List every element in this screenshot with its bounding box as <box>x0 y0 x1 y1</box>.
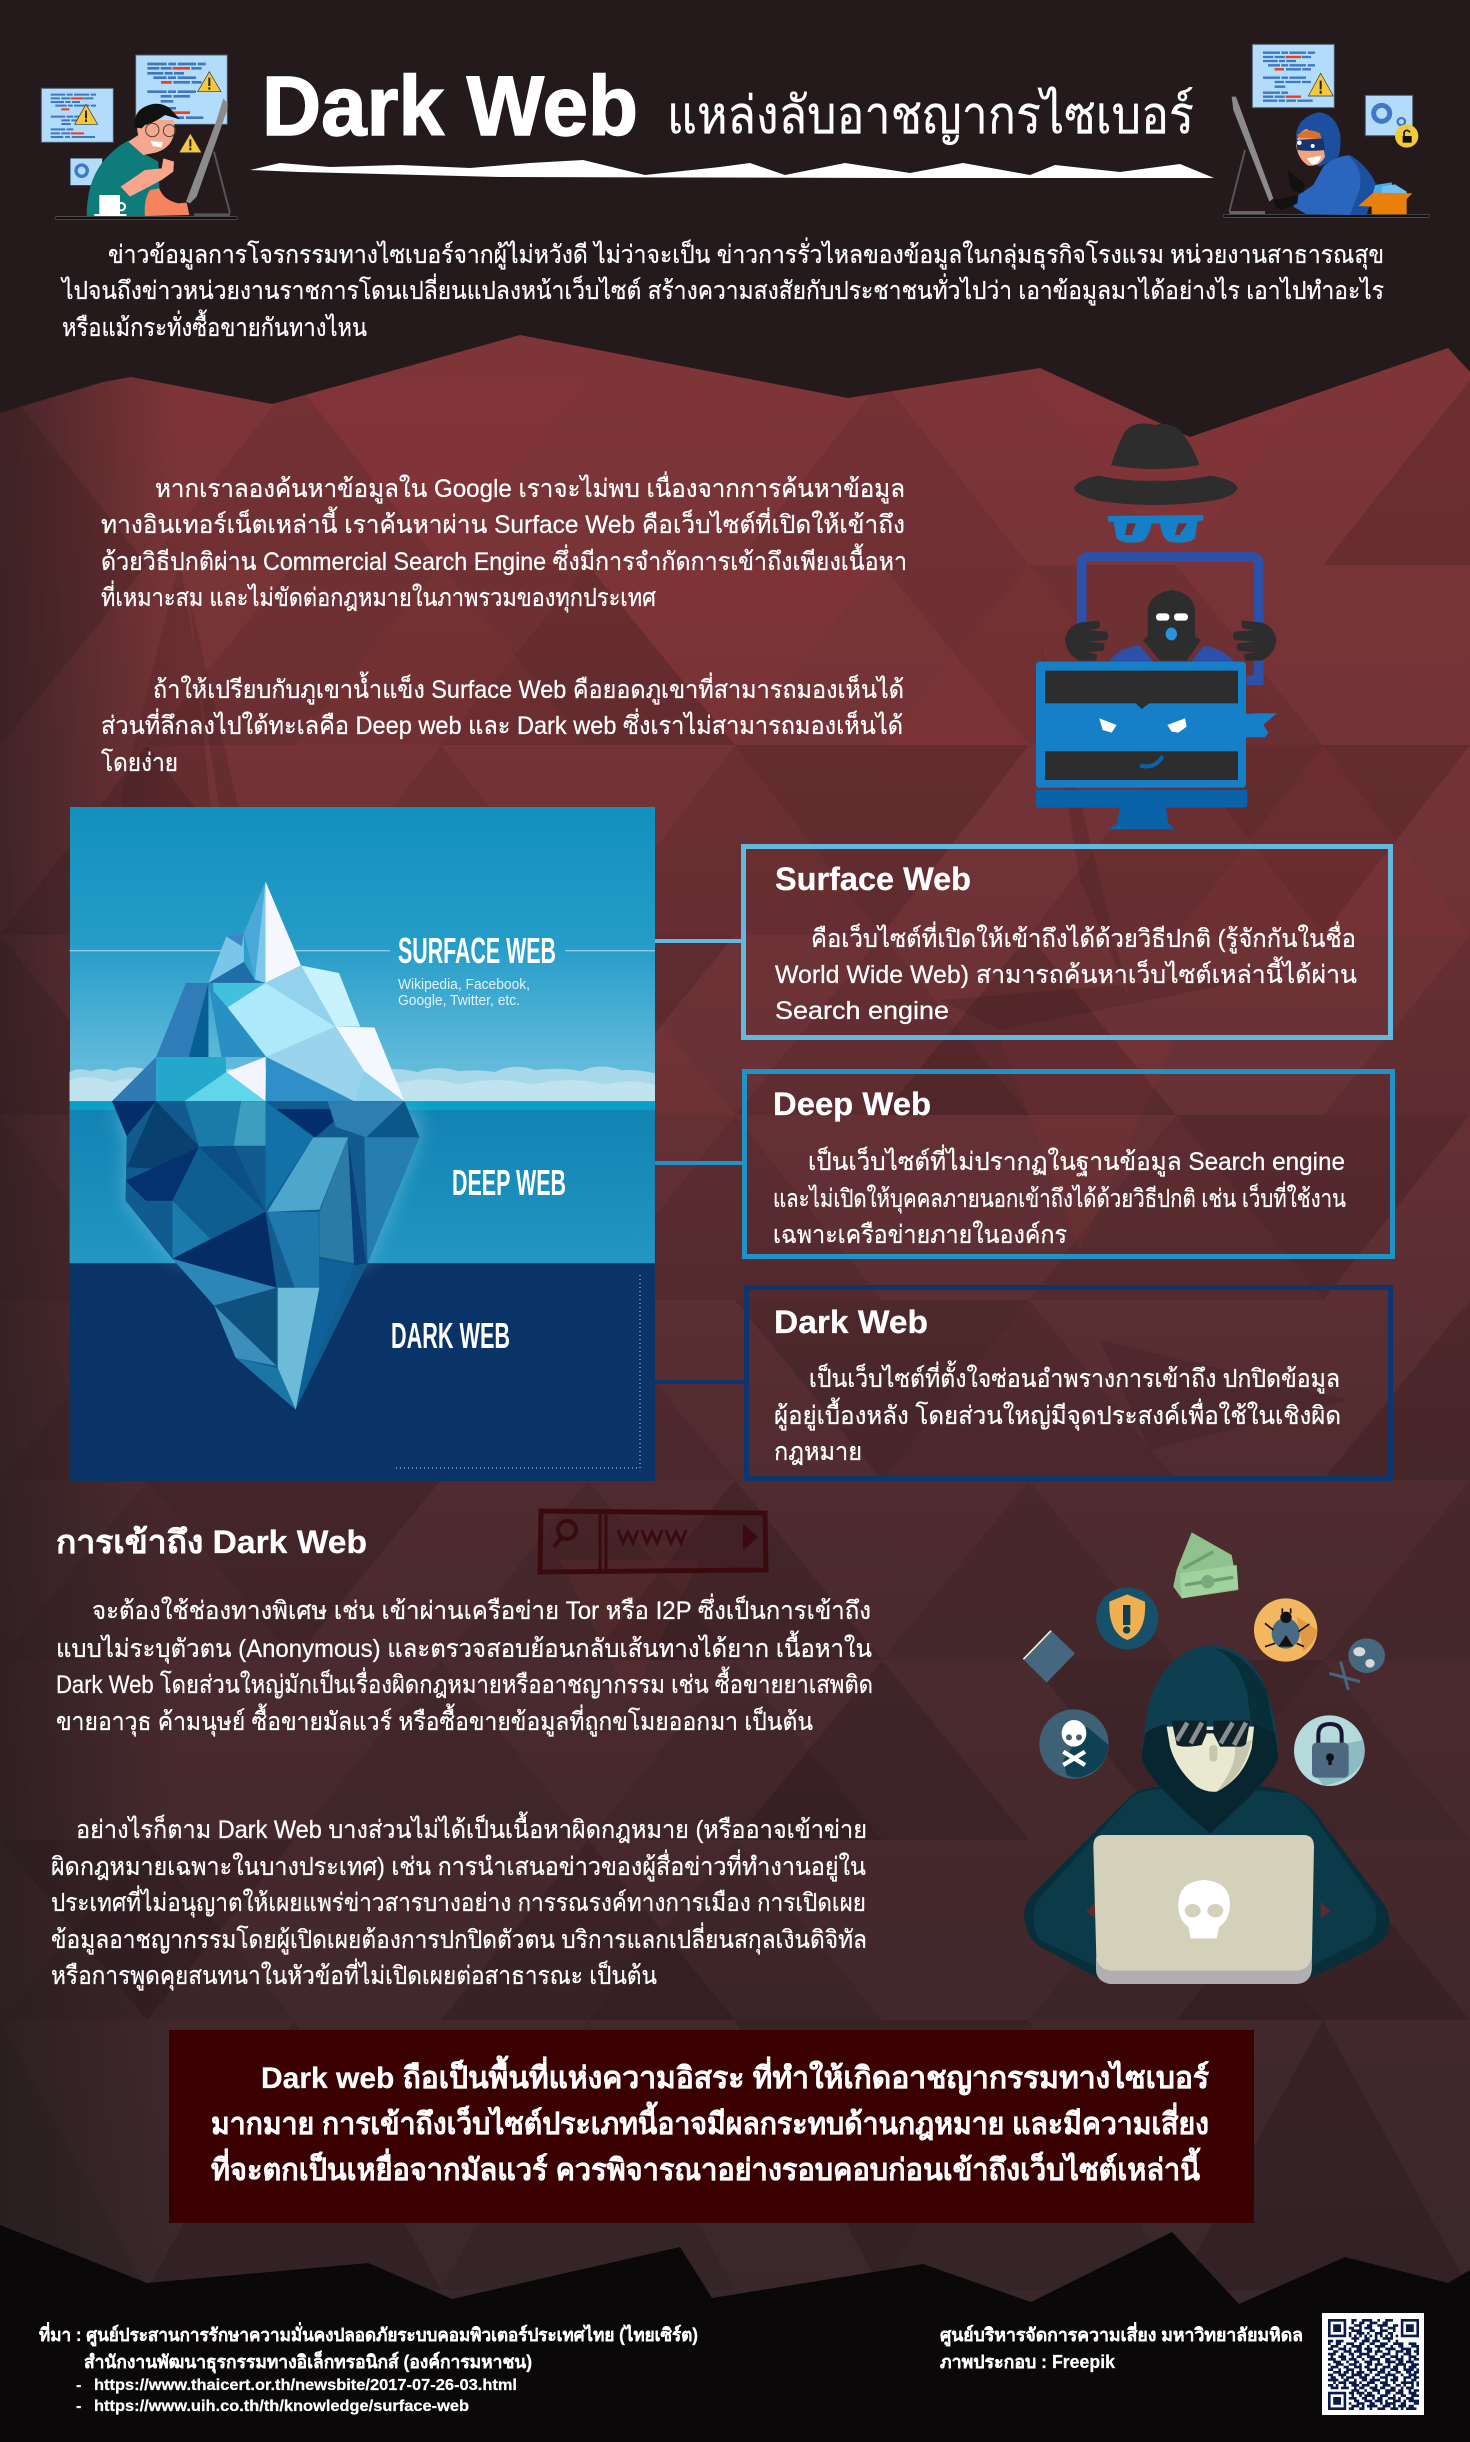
footer: sources: สำนักงานพัฒนาธุรกรรมทางอิเล็กทรอนิกส์ (องค์การมหาชน) <box>84 2350 532 2374</box>
panel: Dark Web <box>746 1288 1390 1478</box>
iceberg labels: Wikipedia, Facebook, <box>398 976 530 993</box>
iceberg chart <box>70 807 655 1481</box>
paragraph: Google and Surface Web: ด้วยวิธีปกติผ่าน Commercial Search Engine ซึ่งมีการจำกัดการเข้าถึงเพียงเนื้อหา <box>101 543 907 576</box>
paragraph: Google and Surface Web: ทางอินเทอร์เน็ตเหล่านี้ เราค้นหาผ่าน Surface Web คือเว็บไซต์ที่เปิดให้เข้าถึง <box>101 506 905 539</box>
paragraph: Google and Surface Web: ที่เหมาะสม และไม่ขัดต่อกฎหมายในภาพรวมของทุกประเทศ <box>101 580 656 613</box>
callout: summary: มากมาย การเข้าถึงเว็บไซต์ประเภทนี้อาจมีผลกระทบด้านกฎหมาย และมีความเสี่ยง <box>211 2101 1209 2141</box>
text: Dark Web description <box>774 1360 1341 1466</box>
iceberg labels: Google, Twitter, etc. <box>398 992 520 1009</box>
intro text: หรือแม้กระทั่งซื้อขายกันทางไหน <box>62 309 367 342</box>
icon: bug <box>1254 1598 1317 1662</box>
text: Surface Web description: Search engine <box>775 997 949 1025</box>
paragraph: legitimate uses: ประเทศที่ไม่อนุญาตให้เผยแพร่ข่าวสารบางอย่าง การรณรงค์ทางการเมือง การเปิดเผย <box>51 1885 866 1918</box>
footer: sources: https://www.thaicert.or.th/newsbite/2017-07-26-03.html <box>94 2377 517 2394</box>
iceberg above water <box>112 882 404 1101</box>
connector lines <box>655 939 745 1384</box>
heading: accessing the Dark Web: การเข้าถึง Dark Web <box>56 1524 367 1560</box>
text: Deep Web description: และไม่เปิดให้บุคคลภายนอกเข้าถึงได้ด้วยวิธีปกติ เช่น เว็บที่ใช้งาน <box>773 1181 1346 1214</box>
title <box>262 59 1194 153</box>
icon: money <box>1173 1532 1238 1598</box>
iceberg below water <box>112 1101 419 1410</box>
paragraph: Google and Surface Web: หากเราลองค้นหาข้อมูลใน Google เราจะไม่พบ เนื่องจากการค้นหาข้อมูล <box>155 471 905 504</box>
title: แหล่งลับอาชญากรไซเบอร์ <box>667 86 1194 145</box>
intro text: ไปจนถึงข่าวหน่วยงานราชการโดนเปลี่ยนแปลงหน้าเว็บไซต์ สร้างความสงสัยกับประชาชนทั่วไปว่า เอาข้อมูลมาได้อย่างไร เอาไปทำอะไร <box>60 273 1384 306</box>
icon: browser search bar sketch <box>540 1511 766 1572</box>
panel: Deep Web <box>744 1072 1392 1256</box>
paragraph: legitimate uses: ข้อมูลอาชญากรรมโดยผู้เปิดเผยต้องการปกปิดตัวตน บริการแลกเปลี่ยนสกุลเงินดิจิทัล <box>51 1922 867 1955</box>
text: Surface Web description: World Wide Web) สามารถค้นหาเว็บไซต์เหล่านี้ได้ผ่าน <box>775 956 1357 989</box>
clouds <box>70 1067 655 1101</box>
icon: spy behind monitor <box>1036 423 1277 829</box>
title: Dark Web <box>262 59 638 153</box>
paragraph: Google and Surface Web <box>101 471 907 613</box>
paragraph: how to access: แบบไม่ระบุตัวตน (Anonymous) และตรวจสอบย้อนกลับเส้นทางได้ยาก เนื้อหาใน <box>56 1630 872 1664</box>
footer: sources: - <box>76 2398 81 2415</box>
paragraph: how to access: จะต้องใช้ช่องทางพิเศษ เช่น เข้าผ่านเครือข่าย Tor หรือ I2P ซึ่งเป็นการเข้าถึง <box>92 1593 871 1625</box>
iceberg labels: SURFACE WEB <box>398 930 556 971</box>
text: Deep Web description: เฉพาะเครือข่ายภายในองค์กร <box>773 1220 1067 1249</box>
callout: summary: ที่จะตกเป็นเหยื่อจากมัลแวร์ ควรพิจารณาอย่างรอบคอบก่อนเข้าถึงเว็บไซต์เหล่านี้ <box>211 2147 1201 2187</box>
panel: Surface Web <box>744 846 1390 1038</box>
paragraph: iceberg comparison <box>101 671 904 777</box>
intro text: ข่าวข้อมูลการโจรกรรมทางไซเบอร์จากผู้ไม่หวังดี ไม่ว่าจะเป็น ข่าวการรั่วไหลของข้อมูลในกลุ่มธุรกิจโรงแรม หน่วยงานสาธารณสุข <box>108 237 1384 270</box>
footer: sources: ที่มา : ศูนย์ประสานการรักษาความมั่นคงปลอดภัยระบบคอมพิวเตอร์ประเทศไทย (ไทยเซิร์ต) <box>39 2322 698 2347</box>
paragraph: iceberg comparison: ถ้าให้เปรียบกับภูเขาน้ำแข็ง Surface Web คือยอดภูเขาที่สามารถมองเห็นได้ <box>153 671 904 705</box>
paragraph: legitimate uses: อย่างไรก็ตาม Dark Web บางส่วนไม่ได้เป็นเนื้อหาผิดกฎหมาย (หรืออาจเข้าข่าย <box>76 1811 867 1844</box>
icon: small skull and crossbones <box>1329 1638 1385 1690</box>
icon: skull on dark circle <box>1039 1709 1109 1779</box>
text: Surface Web description: คือเว็บไซต์ที่เปิดให้เข้าถึงได้ด้วยวิธีปกติ (รู้จักกันในชื่อ <box>811 921 1356 954</box>
icon: notebook <box>1023 1631 1075 1683</box>
iceberg labels: DARK WEB <box>391 1315 510 1356</box>
sky <box>70 807 655 1110</box>
icon: hacker with laptop and threat icons <box>1023 1532 1389 1984</box>
paragraph: how to access <box>56 1593 873 1737</box>
text: Dark Web description: เป็นเว็บไซต์ที่ตั้งใจซ่อนอำพรางการเข้าถึง ปกปิดข้อมูล <box>809 1360 1340 1394</box>
heading: Dark Web: Dark Web <box>774 1304 928 1340</box>
text: Deep Web description: เป็นเว็บไซต์ที่ไม่ปรากฏในฐานข้อมูล Search engine <box>808 1144 1345 1177</box>
iceberg labels <box>391 930 566 1356</box>
surface line <box>70 949 655 952</box>
text: Surface Web description <box>775 921 1357 1025</box>
callout: summary: Dark web ถือเป็นพื้นที่แห่งความอิสระ ที่ทำให้เกิดอาชญากรรมทางไซเบอร์ <box>261 2055 1209 2096</box>
paragraph: how to access: ขายอาวุธ ค้ามนุษย์ ซื้อขายมัลแวร์ หรือซื้อขายข้อมูลที่ถูกขโมยออกมา เป็นต้น <box>56 1703 813 1737</box>
heading: Surface Web: Surface Web <box>775 861 971 897</box>
water glow <box>112 1111 419 1263</box>
sea strip <box>70 1101 655 1111</box>
paragraph: iceberg comparison: โดยง่าย <box>101 748 178 777</box>
footer: sources: - <box>76 2377 81 2394</box>
water <box>70 1110 655 1264</box>
dark layer <box>70 1263 655 1481</box>
intro text <box>60 237 1384 342</box>
paragraph: legitimate uses <box>51 1811 867 1991</box>
icon: worried man at computer <box>41 55 237 220</box>
QR code <box>1322 2313 1424 2415</box>
footer: sources <box>39 2322 698 2415</box>
text: Dark Web description: ผู้อยู่เบื้องหลัง โดยส่วนใหญ่มีจุดประสงค์เพื่อใช้ในเชิงผิด <box>774 1397 1341 1431</box>
callout: summary <box>169 2030 1254 2223</box>
footer: credits: ศูนย์บริหารจัดการความเสี่ยง มหาวิทยาลัยมหิดล <box>940 2322 1303 2347</box>
text: Deep Web description <box>773 1144 1346 1249</box>
paragraph: legitimate uses: ผิดกฎหมายเฉพาะในบางประเทศ) เช่น การนำเสนอข่าวของผู้สื่อข่าวที่ทำงานอยู่ใน <box>51 1849 866 1882</box>
footer: sources: https://www.uih.co.th/th/knowledge/surface-web <box>94 2398 469 2415</box>
paragraph: iceberg comparison: ส่วนที่ลึกลงไปใต้ทะเลคือ Deep web และ Dark web ซึ่งเราไม่สามารถมองเห็นได้ <box>101 708 903 740</box>
icon: shield <box>1096 1587 1158 1649</box>
laptop <box>1093 1835 1314 1984</box>
iceberg labels: DEEP WEB <box>452 1162 566 1203</box>
footer: credits: ภาพประกอบ : Freepik <box>940 2352 1116 2372</box>
icon: hooded hacker at computer <box>1223 44 1429 217</box>
hacker body <box>1024 1645 1389 1979</box>
title brush underline <box>250 160 1214 178</box>
paragraph: legitimate uses: หรือการพูดคุยสนทนาในหัวข้อที่ไม่เปิดเผยต่อสาธารณะ เป็นต้น <box>51 1958 657 1991</box>
icon: padlock <box>1294 1715 1365 1786</box>
heading: Deep Web: Deep Web <box>773 1086 931 1122</box>
text: Dark Web description: กฎหมาย <box>774 1438 862 1466</box>
footer: credits <box>940 2322 1303 2372</box>
paragraph: how to access: Dark Web โดยส่วนใหญ่มักเป็นเรื่องผิดกฎหมายหรืออาชญากรรม เช่น ซื้อขายยาเสพติด <box>56 1666 873 1699</box>
